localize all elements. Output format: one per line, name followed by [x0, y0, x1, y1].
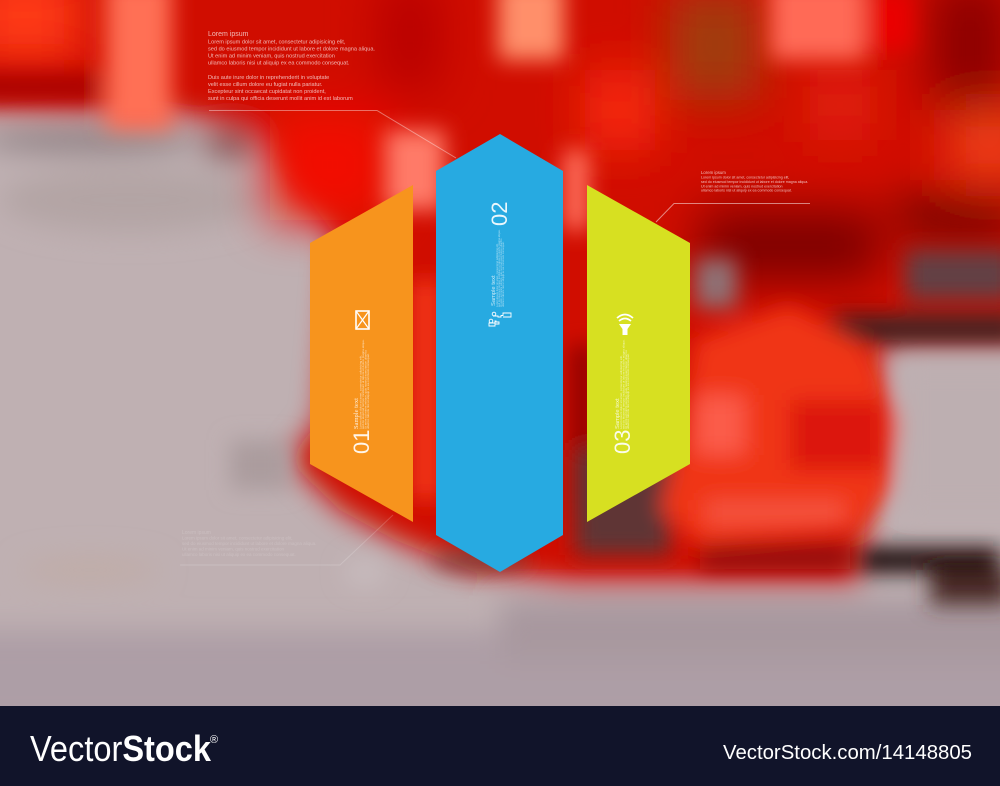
number 02: 02	[487, 202, 512, 226]
text block: orange body	[358, 339, 370, 429]
callout: top right text: ullamco laboris nisi ut aliquip ex ea commodo consequat.	[701, 188, 792, 192]
text block: blue body: sed do eiusmod tempor incididunt ut labore et dolore magna aliqua.	[497, 229, 501, 307]
text block: blue body	[495, 229, 505, 307]
text block: blue body: Lorem ipsum dolor sit amet, consectetur adipisicing elit,	[495, 243, 499, 307]
heading: sample text: Sample text	[491, 275, 497, 306]
number 01: 01	[349, 430, 374, 454]
callout: top right text	[701, 170, 808, 192]
callout: top left text: Duis aute irure dolor in reprehenderit in voluptate	[208, 75, 329, 81]
text block: yellow body: Ut enim ad minim veniam, quis nostrud exercitation ullamco	[624, 349, 628, 429]
text block: yellow body: Lorem ipsum dolor sit amet, consectetur adipisicing elit,	[619, 355, 623, 429]
callout: bottom left text: sed do eiusmod tempor incididunt ut labore et dolore magna aliqua.	[182, 541, 316, 546]
image id: VectorStock.com/14148805	[723, 742, 972, 764]
footer bar	[0, 706, 1000, 786]
number 03: 03	[610, 430, 635, 454]
callout: top left text: velit esse cillum dolore eu fugiat nulla pariatur.	[208, 82, 323, 88]
callout: bottom left text: Ut enim ad minim veniam, quis nostrud exercitation	[182, 546, 285, 552]
callout: bottom left text: Lorem ipsum	[182, 530, 211, 536]
logo: VectorStock: VectorStock	[30, 728, 212, 769]
callout: top left text: Lorem ipsum	[208, 31, 249, 38]
callout: bottom left text: Lorem ipsum dolor sit amet, consectetur adipisicing elit,	[182, 536, 293, 540]
text block: yellow body	[619, 339, 630, 429]
icon: connectors	[489, 312, 511, 326]
panel: yellow segment 03	[587, 185, 690, 522]
text block: orange body: Lorem ipsum dolor sit amet, consectetur adipisicing elit,	[358, 355, 362, 429]
logo: registered mark: ®	[210, 734, 218, 746]
callout: top left text	[208, 31, 375, 102]
callout: top right text: Lorem ipsum dolor sit amet, consectetur adipisicing elit,	[701, 176, 789, 180]
leader line: top left	[209, 110, 456, 158]
callout: top left text: ullamco laboris nisi ut aliquip ex ea commodo consequat.	[208, 61, 350, 67]
callout: top left text: Lorem ipsum dolor sit amet, consectetur adipisicing elit,	[208, 40, 346, 46]
text block: yellow body: ullamco laboris nisi ut aliquip ex ea commodo consequat.	[626, 353, 630, 429]
callout: bottom left text	[182, 530, 316, 557]
callout: top left text: Ut enim ad minim veniam, quis nostrud exercitation	[208, 54, 335, 60]
heading: sample text: Sample text	[353, 398, 360, 429]
icon: envelope	[356, 311, 369, 329]
callout: top right text: Ut enim ad minim veniam, quis nostrud exercitation	[701, 184, 782, 188]
text block: orange body: ullamco laboris nisi ut aliquip ex ea commodo consequat.	[366, 353, 370, 429]
text block: yellow body: sed do eiusmod tempor incididunt ut labore et dolore magna aliqua.	[622, 339, 626, 429]
text block: blue body: Ut enim ad minim veniam, quis nostrud exercitation ullamco	[499, 238, 503, 307]
callout: top right text: Lorem ipsum	[701, 170, 726, 175]
text block: orange body: sed do eiusmod tempor incididunt ut labore et dolore magna aliqua.	[361, 339, 365, 429]
text block: blue body: ullamco laboris nisi ut aliquip ex ea commodo consequat.	[501, 241, 505, 307]
leader line: bottom left	[180, 515, 393, 565]
callout: bottom left text: ullamco laboris nisi ut aliquip ex ea commodo consequat.	[182, 552, 296, 557]
callout: top left text: Excepteur sint occaecat cupidatat non proident,	[208, 89, 326, 95]
heading: sample text: Sample text	[615, 398, 621, 429]
leader line: top right	[656, 204, 810, 222]
icon: wifi speaker	[617, 314, 633, 335]
callout: top left text: sed do eiusmod tempor incididunt ut labore et dolore magna aliqua.	[208, 46, 375, 52]
text block: orange body: Ut enim ad minim veniam, quis nostrud exercitation ullamco	[364, 349, 368, 429]
panel: blue segment 02	[436, 134, 563, 572]
callout: top left text: sunt in culpa qui officia deserunt mollit anim id est laborum	[208, 96, 353, 102]
callout: top right text: sed do eiusmod tempor incididunt ut labore et dolore magna aliqua.	[701, 180, 808, 184]
panel: orange segment 01	[310, 185, 413, 522]
